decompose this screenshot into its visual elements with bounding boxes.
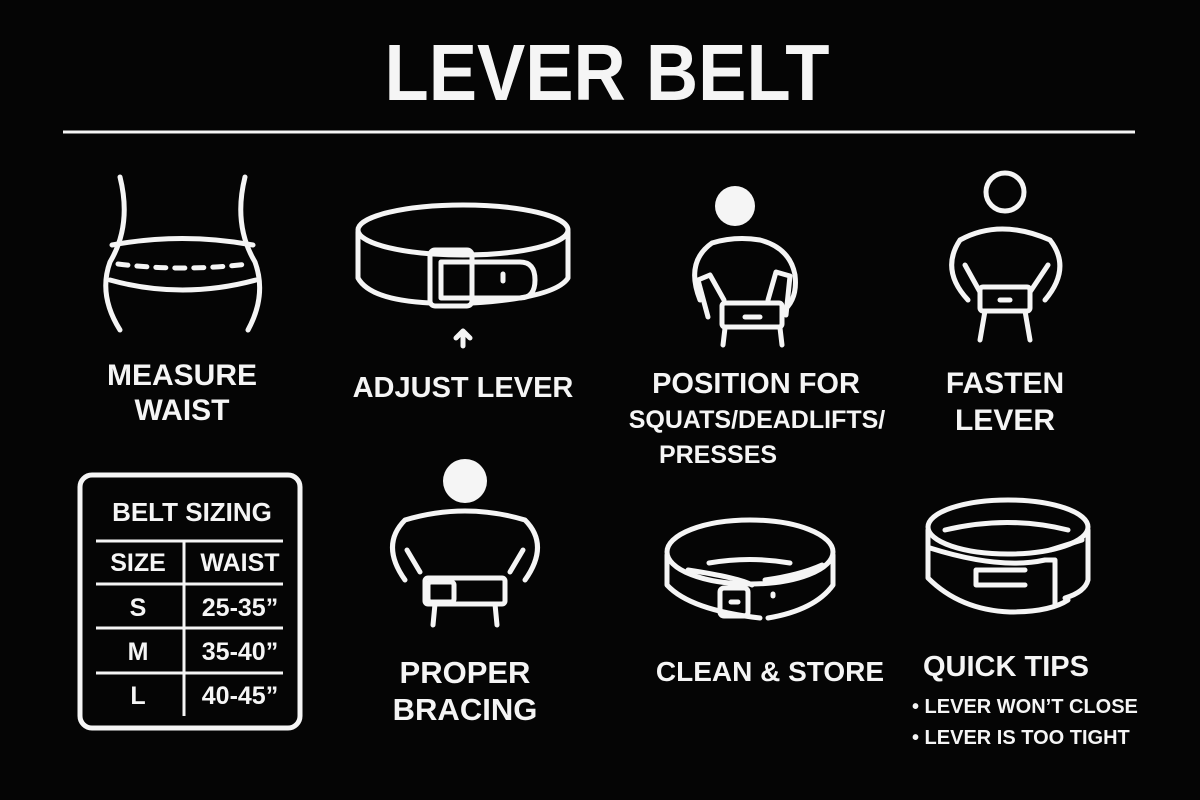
- table text: S: [130, 594, 146, 622]
- quick tips: • LEVER IS TOO TIGHT: [912, 727, 1130, 749]
- labels: PRESSES: [659, 441, 777, 469]
- icon: quick tips belt: [928, 500, 1088, 612]
- labels: SQUATS/DEADLIFTS/: [629, 406, 885, 434]
- table text: 25-35”: [202, 594, 278, 622]
- title: LEVER BELT: [384, 28, 830, 117]
- table text: SIZE: [110, 549, 166, 577]
- labels: BRACING: [393, 692, 537, 727]
- table box: [80, 475, 300, 728]
- icon: clean & store belt: [667, 520, 833, 618]
- table text: L: [130, 682, 146, 710]
- table text: WAIST: [200, 549, 280, 577]
- icon: adjust lever belt: [358, 205, 568, 346]
- labels: ADJUST LEVER: [353, 372, 573, 404]
- labels: [107, 359, 1064, 727]
- icon: position person: [695, 186, 795, 345]
- quick tips: QUICK TIPS: [923, 651, 1089, 683]
- quick tips: • LEVER WON’T CLOSE: [912, 696, 1138, 718]
- labels: POSITION FOR: [652, 368, 860, 400]
- table text: 40-45”: [202, 682, 278, 710]
- table text: M: [128, 638, 148, 666]
- labels: LEVER: [955, 404, 1055, 437]
- labels: PROPER: [400, 655, 530, 690]
- table text: 35-40”: [202, 638, 278, 666]
- icon: proper bracing person: [392, 459, 538, 625]
- labels: CLEAN & STORE: [656, 656, 884, 687]
- labels: WAIST: [134, 394, 230, 427]
- icon: measure waist: [106, 177, 260, 330]
- quick tips: [912, 651, 1138, 749]
- labels: MEASURE: [107, 359, 257, 392]
- icon: fasten lever person: [952, 173, 1060, 340]
- labels: FASTEN: [946, 367, 1064, 400]
- table text: BELT SIZING: [112, 497, 272, 527]
- table text: [110, 497, 280, 710]
